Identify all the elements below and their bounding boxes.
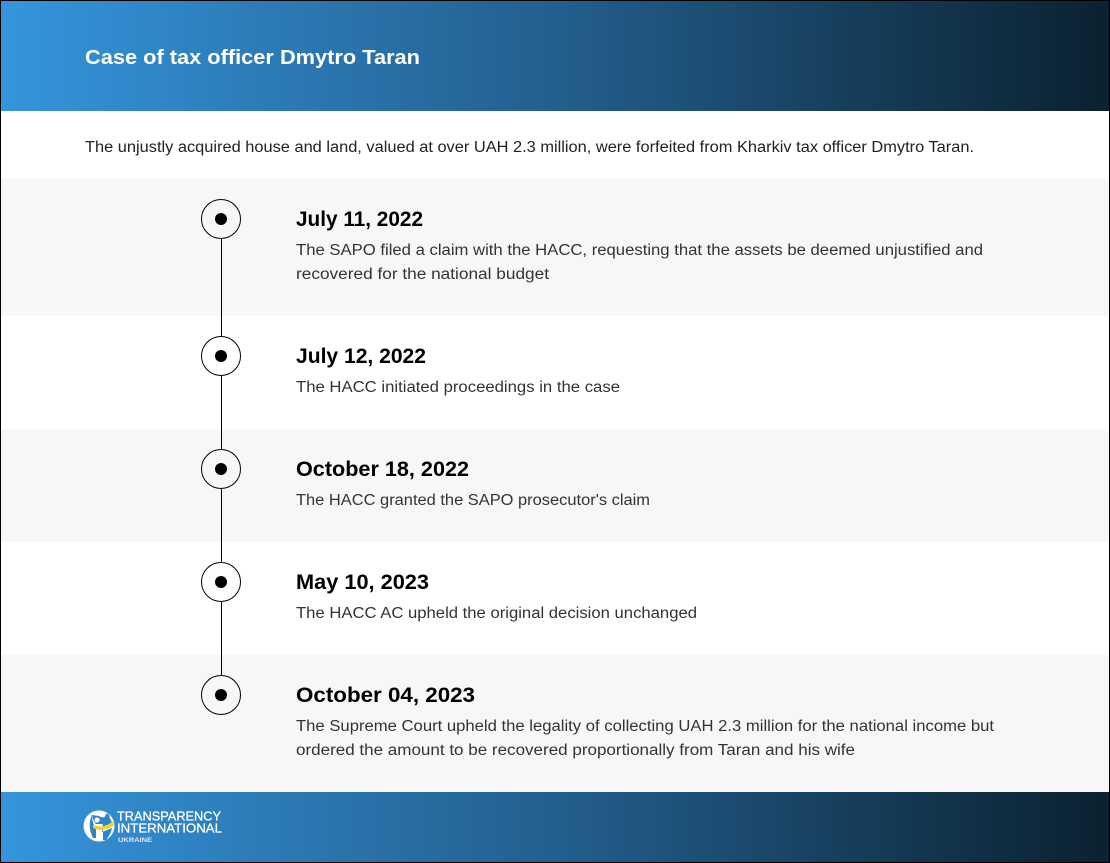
timeline event: October 18, 2022 [202,450,650,509]
description [296,242,983,283]
description: The SAPO filed a claim with the HACC, requesting that the assets be deemed unjustified and [296,242,983,259]
panel: row backgrounds [0,179,1110,792]
marker [202,450,240,488]
header band [0,0,1110,111]
date: May 10, 2023 [296,571,429,594]
description: recovered for the national budget [296,266,550,283]
marker [202,562,240,602]
description: The HACC AC upheld the original decision unchanged [296,605,697,622]
date: October 04, 2023 [296,684,475,707]
timeline event: July 12, 2022 [202,336,620,396]
timeline connector line [220,219,222,695]
timeline event: October 04, 2023 [202,676,995,759]
timeline event: May 10, 2023 [202,562,697,622]
date: July 11, 2022 [296,208,423,231]
logo: Transparency International Ukraine [84,810,222,844]
date: July 12, 2022 [296,345,426,368]
marker [202,676,240,714]
logo text: UKRAINE [118,837,153,844]
description [296,718,995,759]
logo text [117,810,222,844]
description: The HACC initiated proceedings in the case [296,379,620,396]
logo text: TRANSPARENCY [117,810,222,824]
title: Case of tax officer Dmytro Taran [85,46,420,69]
intro text: The unjustly acquired house and land, valued at over UAH 2.3 million, were forfeited from Kharkiv tax officer Dmytro Taran. [85,139,974,156]
footer band [0,792,1110,863]
marker [202,336,240,376]
date: October 18, 2022 [296,458,469,481]
icon: globe with figure [84,810,114,842]
description: ordered the amount to be recovered proportionally from Taran and his wife [296,742,855,759]
description: The Supreme Court upheld the legality of collecting UAH 2.3 million for the national income but [296,718,995,735]
marker [202,200,240,238]
logo text: INTERNATIONAL [117,822,222,836]
timeline event: July 11, 2022 [202,200,983,283]
description: The HACC granted the SAPO prosecutor's claim [296,492,650,509]
